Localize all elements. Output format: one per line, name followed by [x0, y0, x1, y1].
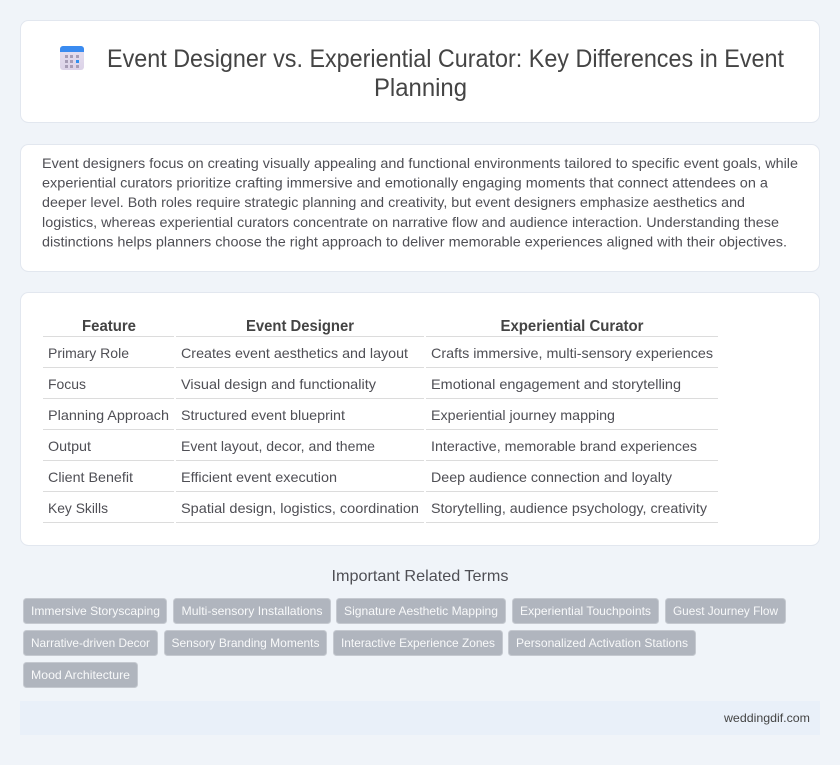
table row: focus: [48, 376, 681, 392]
table row: key skills: Storytelling, audience psychology, creativity: [431, 500, 707, 516]
text block: summary: logistics, whereas experiential curators concentrate on narrative flow and audience interaction. Understanding these: [42, 214, 779, 230]
footer bar: [20, 701, 820, 735]
icon: calendar: [60, 46, 84, 70]
tag: interactive experience zones: Interactive Experience Zones: [341, 636, 495, 650]
table header: [82, 318, 644, 335]
title: [107, 45, 784, 102]
tag: multi-sensory installations: Multi-sensory Installations: [182, 604, 322, 618]
table header: Feature: [82, 318, 136, 335]
table row: client benefit: Client Benefit: [48, 469, 133, 485]
tag: interactive experience zones: [334, 630, 502, 656]
table row: primary role: Crafts immersive, multi-sensory experiences: [431, 345, 713, 361]
tag: immersive storyscaping: [24, 598, 166, 624]
table row: client benefit: Efficient event execution: [181, 469, 337, 485]
tag: narrative-driven decor: Narrative-driven Decor: [31, 636, 150, 650]
tag: narrative-driven decor: [24, 630, 158, 656]
table row: output: Interactive, memorable brand experiences: [431, 438, 697, 454]
table row: key skills: Key Skills: [48, 500, 108, 516]
table row: primary role: [48, 345, 713, 361]
title: Planning: [374, 74, 467, 102]
table row: output: [48, 438, 697, 454]
tag: signature aesthetic mapping: [336, 598, 506, 624]
table header: Experiential Curator: [500, 318, 644, 335]
tag: personalized activation stations: [508, 630, 696, 656]
table row: output: Output: [48, 438, 91, 454]
table row: focus: Emotional engagement and storytelling: [431, 376, 681, 392]
table row: primary role: Creates event aesthetics and layout: [181, 345, 408, 361]
table row: client benefit: [48, 469, 672, 485]
table row: planning approach: Structured event blueprint: [181, 407, 345, 423]
panel: comparison table: [20, 292, 820, 546]
tag: sensory branding moments: [164, 630, 326, 656]
table row: planning approach: [48, 407, 615, 423]
table row: focus: Focus: [48, 376, 86, 392]
panel: title header: [20, 20, 820, 122]
tag: multi-sensory installations: [174, 598, 330, 624]
table header: Event Designer: [246, 318, 354, 335]
tag: guest journey flow: Guest Journey Flow: [673, 604, 778, 618]
table row: client benefit: Deep audience connection and loyalty: [431, 469, 672, 485]
tag: immersive storyscaping: Immersive Storyscaping: [31, 604, 160, 618]
table row: planning approach: Experiential journey mapping: [431, 407, 615, 423]
text block: summary: deeper level. Both roles require strategic planning and creativity, but event designers emphasize aesthetics and: [42, 194, 745, 210]
tag: experiential touchpoints: [512, 598, 658, 624]
table row: planning approach: Planning Approach: [48, 407, 169, 423]
heading: important related terms: Important Related Terms: [332, 568, 508, 585]
panel: summary paragraph: [20, 144, 820, 272]
text block: summary: [42, 155, 798, 249]
title: Event Designer vs. Experiential Curator: Key Differences in Event: [107, 45, 784, 73]
table row: focus: Visual design and functionality: [181, 376, 376, 392]
text block: summary: Event designers focus on creating visually appealing and functional environments tailored to specific event goals, while: [42, 155, 798, 171]
tag: mood architecture: [24, 662, 138, 688]
table row: primary role: Primary Role: [48, 345, 129, 361]
tag: sensory branding moments: Sensory Branding Moments: [172, 636, 320, 650]
tag: guest journey flow: [666, 598, 786, 624]
text block: summary: distinctions helps planners choose the right approach to deliver memorable experiences aligned with their objectives.: [42, 233, 787, 249]
tag: personalized activation stations: Personalized Activation Stations: [516, 636, 688, 650]
footer source text: weddingdif.com: [723, 711, 810, 725]
related term tags: [24, 598, 786, 688]
table row: key skills: Spatial design, logistics, coordination: [181, 500, 419, 516]
table row: key skills: [48, 500, 707, 516]
tag: signature aesthetic mapping: Signature Aesthetic Mapping: [344, 604, 498, 618]
table row: output: Event layout, decor, and theme: [181, 438, 375, 454]
tag: mood architecture: Mood Architecture: [31, 668, 130, 682]
text block: summary: experiential curators prioritize crafting immersive and emotionally engaging moments that connect attendees on a: [42, 175, 768, 191]
tag: experiential touchpoints: Experiential Touchpoints: [520, 604, 651, 618]
